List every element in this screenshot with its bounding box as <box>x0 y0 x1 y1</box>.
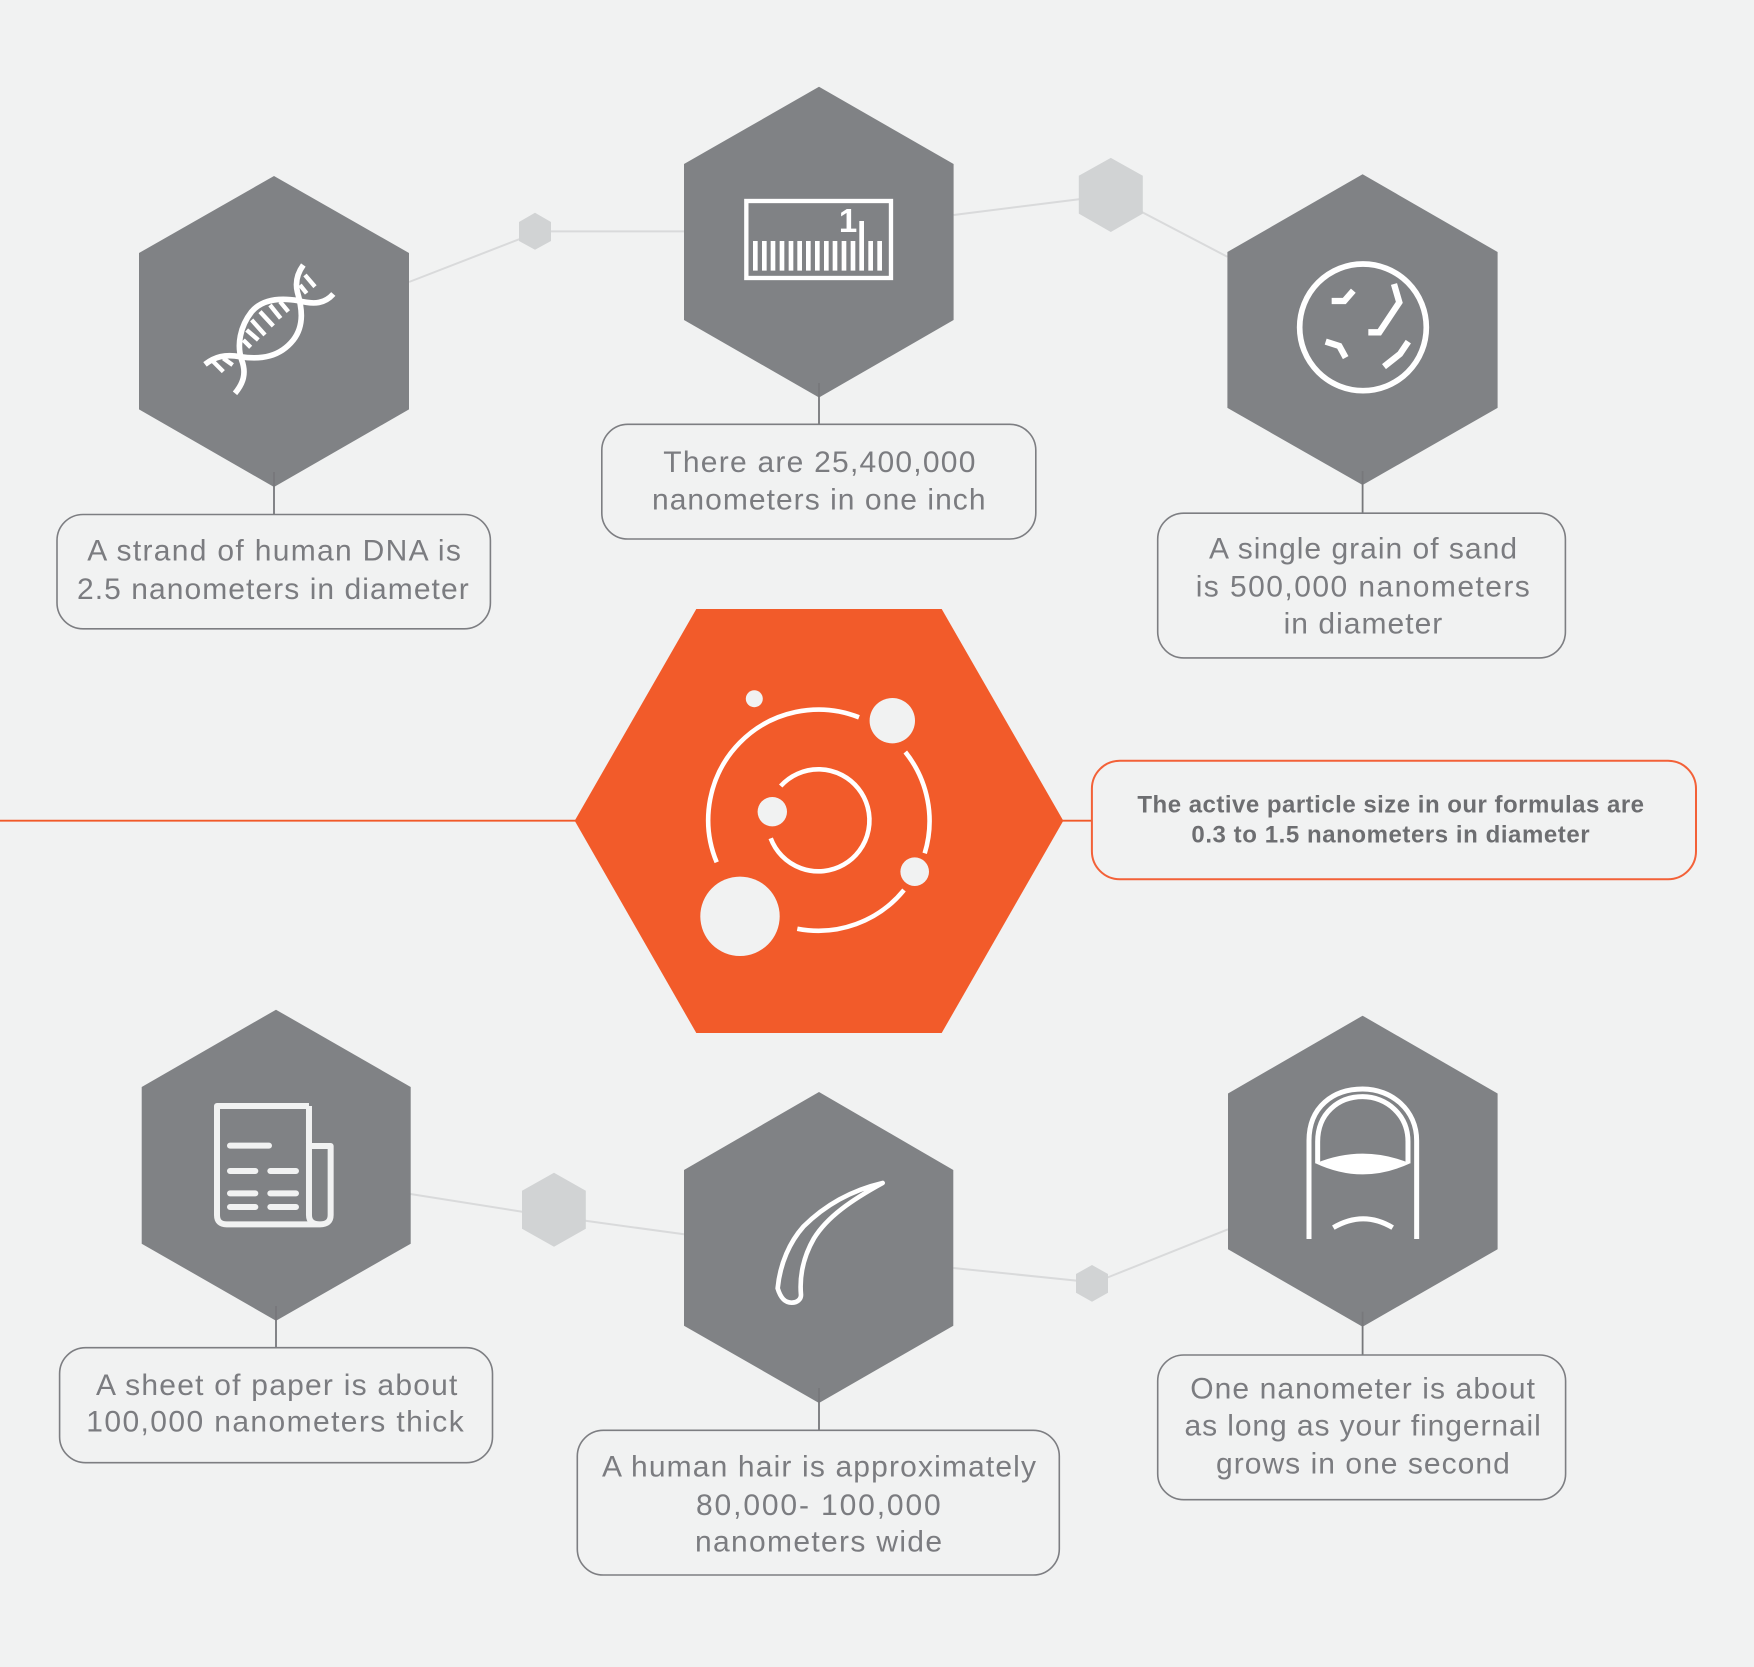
text box: ruler <box>602 424 1036 539</box>
connector stem <box>818 1388 820 1430</box>
caption: paper: 100,000 nanometers thick <box>86 1406 465 1439</box>
icon: fingernail <box>1309 1089 1417 1239</box>
text box: DNA <box>57 514 490 629</box>
panel: ruler <box>602 87 1036 539</box>
caption: ruler <box>652 446 986 516</box>
caption: paper: A sheet of paper is about <box>96 1369 458 1402</box>
caption: paper <box>86 1369 465 1439</box>
panel: sand <box>1158 174 1565 658</box>
caption: fingernail: as long as your fingernail <box>1184 1410 1541 1443</box>
caption: ruler: nanometers in one inch <box>652 483 986 516</box>
caption: DNA <box>77 535 469 606</box>
caption: fingernail: One nanometer is about <box>1190 1372 1536 1405</box>
icon: particles and orbits <box>700 690 930 956</box>
caption: hair: nanometers wide <box>695 1526 942 1559</box>
text box: fingernail <box>1158 1355 1566 1500</box>
caption: sand: is 500,000 nanometers <box>1196 570 1530 603</box>
caption: sand: in diameter <box>1284 608 1442 641</box>
icon: sand grain <box>1300 264 1426 391</box>
caption: hair <box>602 1451 1036 1559</box>
connector: paper to hair <box>410 1173 684 1247</box>
panel: fingernail <box>1158 1016 1566 1500</box>
connector: ruler to sand <box>954 158 1227 257</box>
icon: DNA helix <box>205 265 333 393</box>
caption: DNA: 2.5 nanometers in diameter <box>77 573 469 606</box>
panel: DNA <box>57 176 490 629</box>
hexagon: sand <box>1227 174 1498 485</box>
caption: hair: A human hair is approximately <box>602 1451 1036 1484</box>
callout: active particle size: 0.3 to 1.5 nanometers in diameter <box>1191 822 1590 849</box>
icon: hair strand <box>778 1183 883 1303</box>
hexagon: hair <box>684 1092 953 1403</box>
connector stem <box>273 472 275 514</box>
text box: paper <box>60 1348 492 1463</box>
hexagon: paper <box>142 1010 411 1321</box>
panel: paper <box>60 1010 492 1463</box>
connector: right orange line <box>1062 820 1092 822</box>
hexagon: ruler <box>684 87 954 398</box>
caption: fingernail: grows in one second <box>1216 1447 1510 1480</box>
caption: sand <box>1196 533 1530 641</box>
hexagon: fingernail <box>1228 1016 1498 1327</box>
connector: hair to fingernail <box>953 1229 1228 1302</box>
hexagon: orange <box>575 609 1063 1033</box>
icon: sheet of paper <box>217 1106 331 1224</box>
callout: active particle size: The active particle size in our formulas are <box>1137 792 1644 819</box>
hexagon: DNA <box>139 176 409 487</box>
caption: hair: 80,000- 100,000 <box>696 1489 941 1522</box>
connector stem <box>1362 471 1364 513</box>
text box: hair <box>577 1430 1059 1575</box>
icon: ruler <box>746 201 891 278</box>
connector: DNA to ruler <box>409 213 684 282</box>
callout: active particle size <box>1092 761 1696 879</box>
panel: central particle hexagon <box>575 609 1063 1033</box>
connector stem <box>1362 1312 1364 1355</box>
connector stem <box>275 1306 277 1348</box>
text box: sand <box>1158 513 1565 658</box>
panel: hair <box>577 1092 1059 1575</box>
caption: DNA: A strand of human DNA is <box>87 535 461 568</box>
caption: fingernail <box>1184 1372 1541 1480</box>
caption: ruler: There are 25,400,000 <box>663 446 975 479</box>
connector: left orange line <box>0 820 576 822</box>
icon: ruler: 1 <box>839 202 857 239</box>
connector stem <box>818 383 820 424</box>
caption: sand: A single grain of sand <box>1209 533 1517 566</box>
